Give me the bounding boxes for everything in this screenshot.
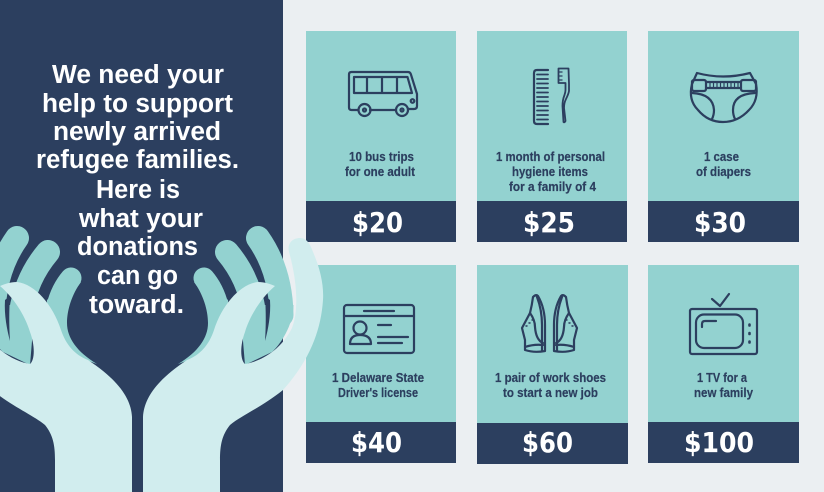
label: driver's license: 1 Delaware State — [332, 371, 424, 385]
label: case of diapers: 1 case — [704, 150, 739, 164]
heading: appeal for support: help to support — [42, 90, 234, 118]
price: $25: $25 — [523, 207, 575, 239]
label: work shoes: to start a new job — [503, 386, 598, 400]
price: $30: $30 — [694, 207, 746, 239]
icon: comb and toothbrush — [534, 68, 569, 124]
label: hygiene items: for a family of 4 — [509, 180, 596, 194]
label: bus trips: 10 bus trips — [349, 150, 414, 164]
label: bus trips: for one adult — [345, 165, 416, 179]
illustration: left hand — [0, 238, 132, 492]
label: driver's license — [332, 371, 424, 400]
panel: left navy background — [0, 0, 283, 492]
label: TV: 1 TV for a — [697, 371, 748, 385]
label: work shoes — [495, 371, 606, 400]
label: TV: new family — [694, 386, 753, 400]
price: $20: $20 — [352, 207, 403, 239]
heading: appeal for support: Here is — [96, 176, 180, 204]
heading: appeal for support: donations — [77, 233, 198, 261]
icon: pair of shoes — [522, 295, 577, 352]
heading: appeal for support: what your — [78, 205, 203, 233]
heading: appeal for support: newly arrived — [53, 118, 221, 146]
label: work shoes: 1 pair of work shoes — [495, 371, 606, 385]
price: $100: $100 — [684, 427, 754, 459]
label: driver's license: Driver's license — [338, 386, 418, 400]
icon: bus — [349, 72, 417, 116]
icon: ID card — [344, 305, 414, 353]
heading: appeal for support: We need your — [52, 61, 224, 89]
icon: television — [690, 294, 757, 354]
label: bus trips — [345, 150, 416, 179]
label: hygiene items — [496, 150, 605, 194]
card: work shoes — [477, 265, 628, 464]
label: TV — [694, 371, 753, 400]
heading: appeal for support: can go — [97, 262, 178, 290]
icon: diaper — [691, 73, 757, 122]
heading: appeal for support: refugee families. — [36, 146, 239, 174]
label: case of diapers — [696, 150, 751, 179]
card: hygiene items — [477, 31, 627, 242]
label: case of diapers: of diapers — [696, 165, 751, 179]
heading: appeal for support — [36, 61, 239, 319]
label: hygiene items: 1 month of personal — [496, 150, 605, 164]
card: bus trips — [306, 31, 456, 242]
label: hygiene items: hygiene items — [512, 165, 588, 179]
heading: appeal for support: toward. — [89, 291, 184, 319]
price: $60: $60 — [522, 427, 573, 459]
price: $40: $40 — [351, 427, 402, 459]
card: driver's license — [306, 265, 456, 463]
card: diapers — [648, 31, 799, 242]
card: TV — [648, 265, 799, 463]
illustration: right hand — [143, 238, 323, 492]
